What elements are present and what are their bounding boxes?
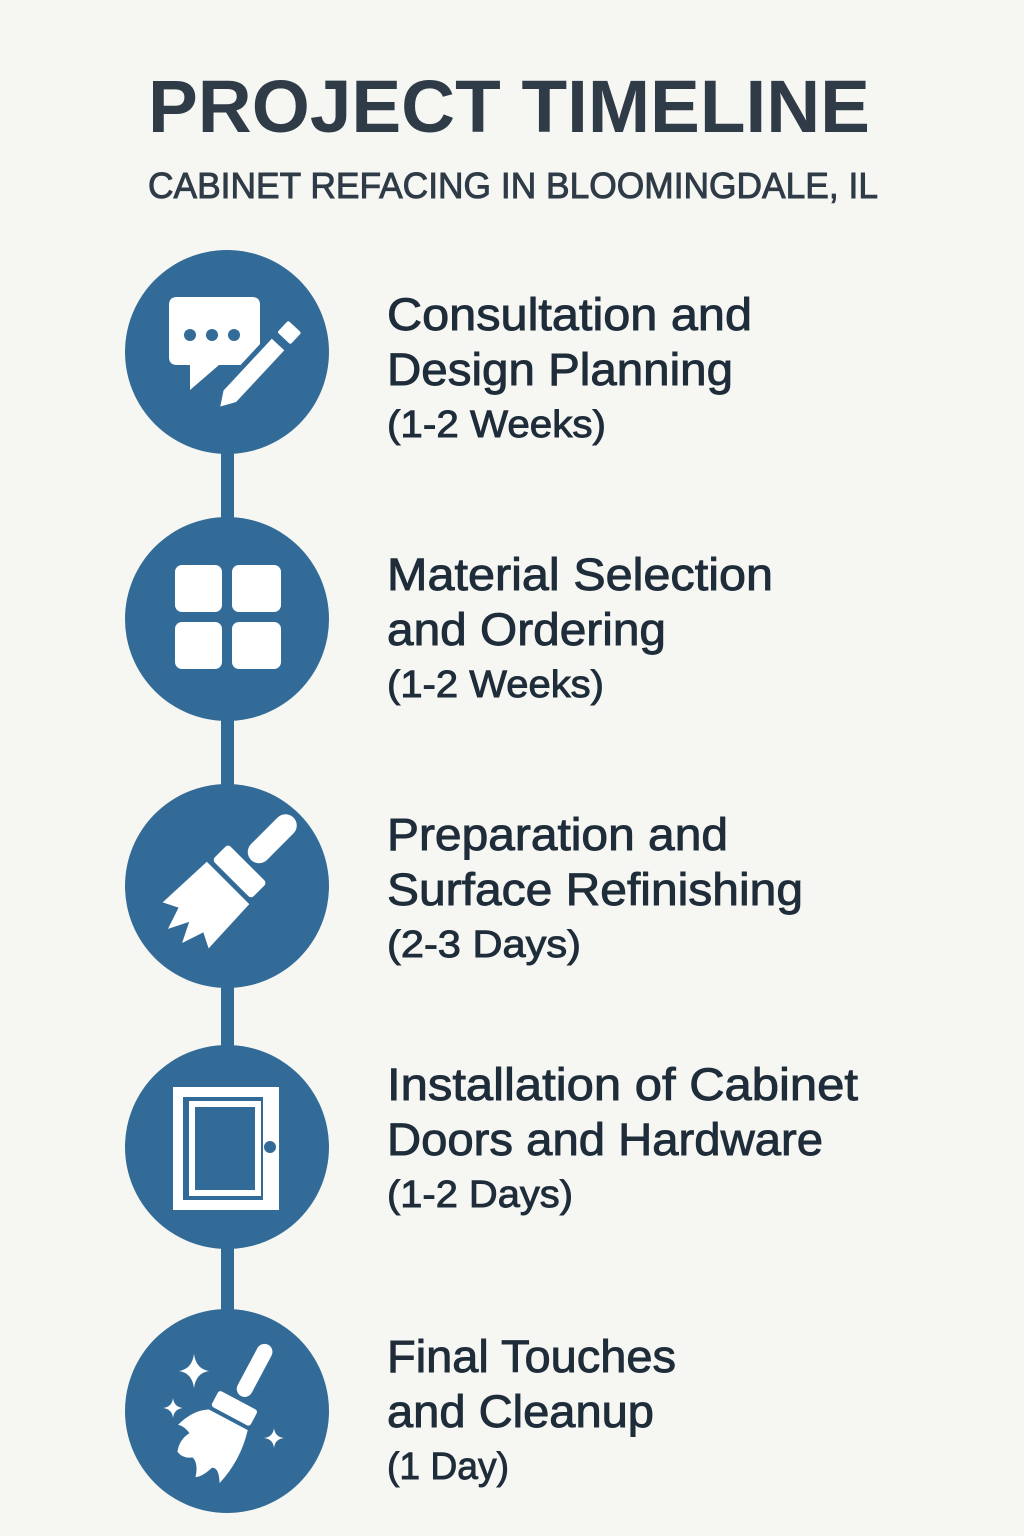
text: step 3: (2-3 Days): [387, 924, 581, 966]
text: step 2: (1-2 Weeks): [387, 664, 604, 706]
icon: cabinet door: [125, 1045, 329, 1249]
step 1: consultation: [125, 250, 752, 454]
text: step 4: Doors and Hardware: [387, 1114, 823, 1165]
text: step 3: Surface Refinishing: [387, 864, 803, 915]
text: step 2: and Ordering: [387, 604, 666, 655]
step 4: installation: [125, 1045, 859, 1249]
title: PROJECT TIMELINE: [148, 65, 870, 148]
text: step 3: [387, 809, 803, 966]
step 5: final touches: [125, 1309, 676, 1513]
text: step 4: [387, 1059, 859, 1216]
text: step 4: (1-2 Days): [387, 1174, 573, 1216]
text: step 1: Consultation and: [387, 289, 752, 340]
step 3: preparation: [125, 784, 803, 988]
text: step 5: [387, 1331, 676, 1488]
subtitle: CABINET REFACING IN BLOOMINGDALE, IL: [148, 165, 878, 206]
icon: paint brush: [125, 784, 329, 988]
text: step 4: Installation of Cabinet: [387, 1059, 859, 1110]
text: step 3: Preparation and: [387, 809, 728, 860]
text: step 2: [387, 549, 773, 706]
icon: broom and sparkles: [125, 1309, 329, 1513]
icon: grid: [125, 517, 329, 721]
text: step 5: Final Touches: [387, 1331, 676, 1382]
icon: chat and pencil: [125, 250, 329, 454]
text: step 1: [387, 289, 752, 446]
text: step 1: Design Planning: [387, 344, 733, 395]
text: step 1: (1-2 Weeks): [387, 404, 606, 446]
connector line: [221, 440, 234, 1320]
text: step 5: (1 Day): [387, 1446, 509, 1488]
text: step 2: Material Selection: [387, 549, 773, 600]
step 2: material: [125, 517, 773, 721]
text: step 5: and Cleanup: [387, 1386, 654, 1437]
